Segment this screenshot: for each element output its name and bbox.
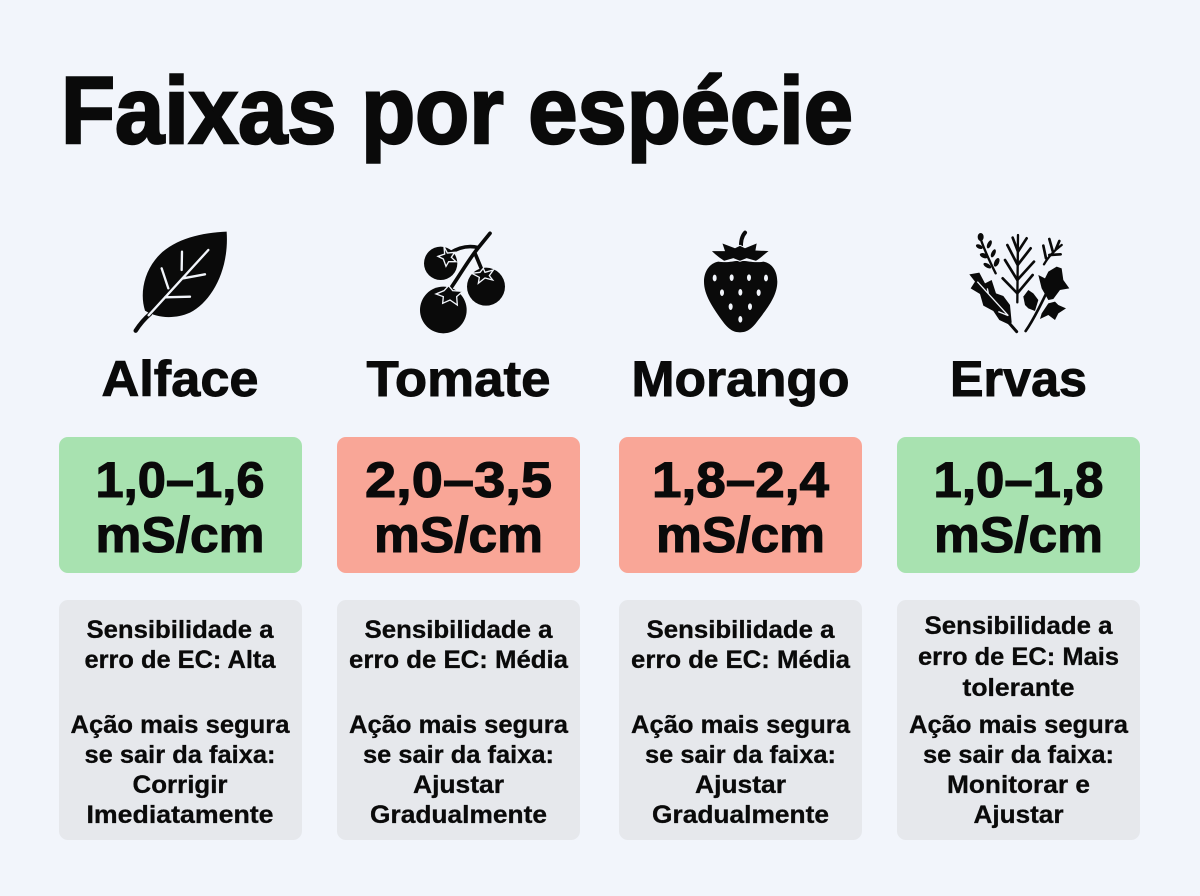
details card: erro de EC: Alta (84, 646, 277, 674)
details card: Imediatamente (86, 801, 274, 829)
details card (619, 600, 862, 840)
icon: tomatoes (420, 233, 505, 333)
range card (59, 437, 302, 573)
details card: tolerante (962, 674, 1075, 702)
details card: Ação mais segura (70, 711, 291, 739)
name: Morango (632, 351, 850, 407)
range card (337, 437, 580, 573)
title: Faixas por espécie (61, 58, 853, 164)
range card (619, 437, 862, 573)
details card (897, 600, 1140, 840)
icon: herbs (969, 233, 1069, 332)
range card: 1,8–2,4 (652, 452, 829, 508)
details card: Sensibilidade a (86, 616, 275, 644)
details card (59, 600, 302, 840)
range card: mS/cm (656, 507, 825, 563)
details card: erro de EC: Média (631, 646, 851, 674)
range card: 2,0–3,5 (365, 452, 552, 508)
range card (897, 437, 1140, 573)
details card: Sensibilidade a (646, 616, 836, 644)
range card: mS/cm (96, 507, 264, 563)
details card: Sensibilidade a (364, 616, 554, 644)
details card: erro de EC: Mais (918, 643, 1119, 671)
column: Ervas (897, 233, 1140, 840)
details card (337, 600, 580, 840)
icon: leaf (136, 232, 227, 331)
icon: strawberry (704, 233, 777, 332)
details card: se sair da faixa: (923, 741, 1114, 769)
range card: mS/cm (374, 507, 543, 563)
details card: Corrigir (132, 771, 228, 799)
details card: Ação mais segura (909, 711, 1129, 739)
details card: Gradualmente (370, 801, 547, 829)
details card: Ação mais segura (349, 711, 569, 739)
details card: Ajustar (413, 771, 504, 799)
name: Alface (102, 351, 258, 407)
range card: 1,0–1,6 (96, 452, 264, 508)
range card: 1,0–1,8 (934, 452, 1104, 508)
column: Morango (619, 233, 862, 840)
details card: erro de EC: Média (349, 646, 569, 674)
details card: se sair da faixa: (645, 741, 836, 769)
column: Tomate (337, 233, 580, 840)
details card: Ajustar (695, 771, 786, 799)
name: Ervas (950, 351, 1087, 407)
column: Alface (59, 232, 302, 840)
details card: se sair da faixa: (84, 741, 276, 769)
details card: Ação mais segura (631, 711, 851, 739)
details card: Gradualmente (652, 801, 829, 829)
range card: mS/cm (934, 507, 1103, 563)
details card: Sensibilidade a (924, 612, 1114, 640)
details card: se sair da faixa: (363, 741, 554, 769)
name: Tomate (366, 351, 550, 407)
details card: Monitorar e (947, 771, 1090, 799)
details card: Ajustar (974, 801, 1064, 829)
